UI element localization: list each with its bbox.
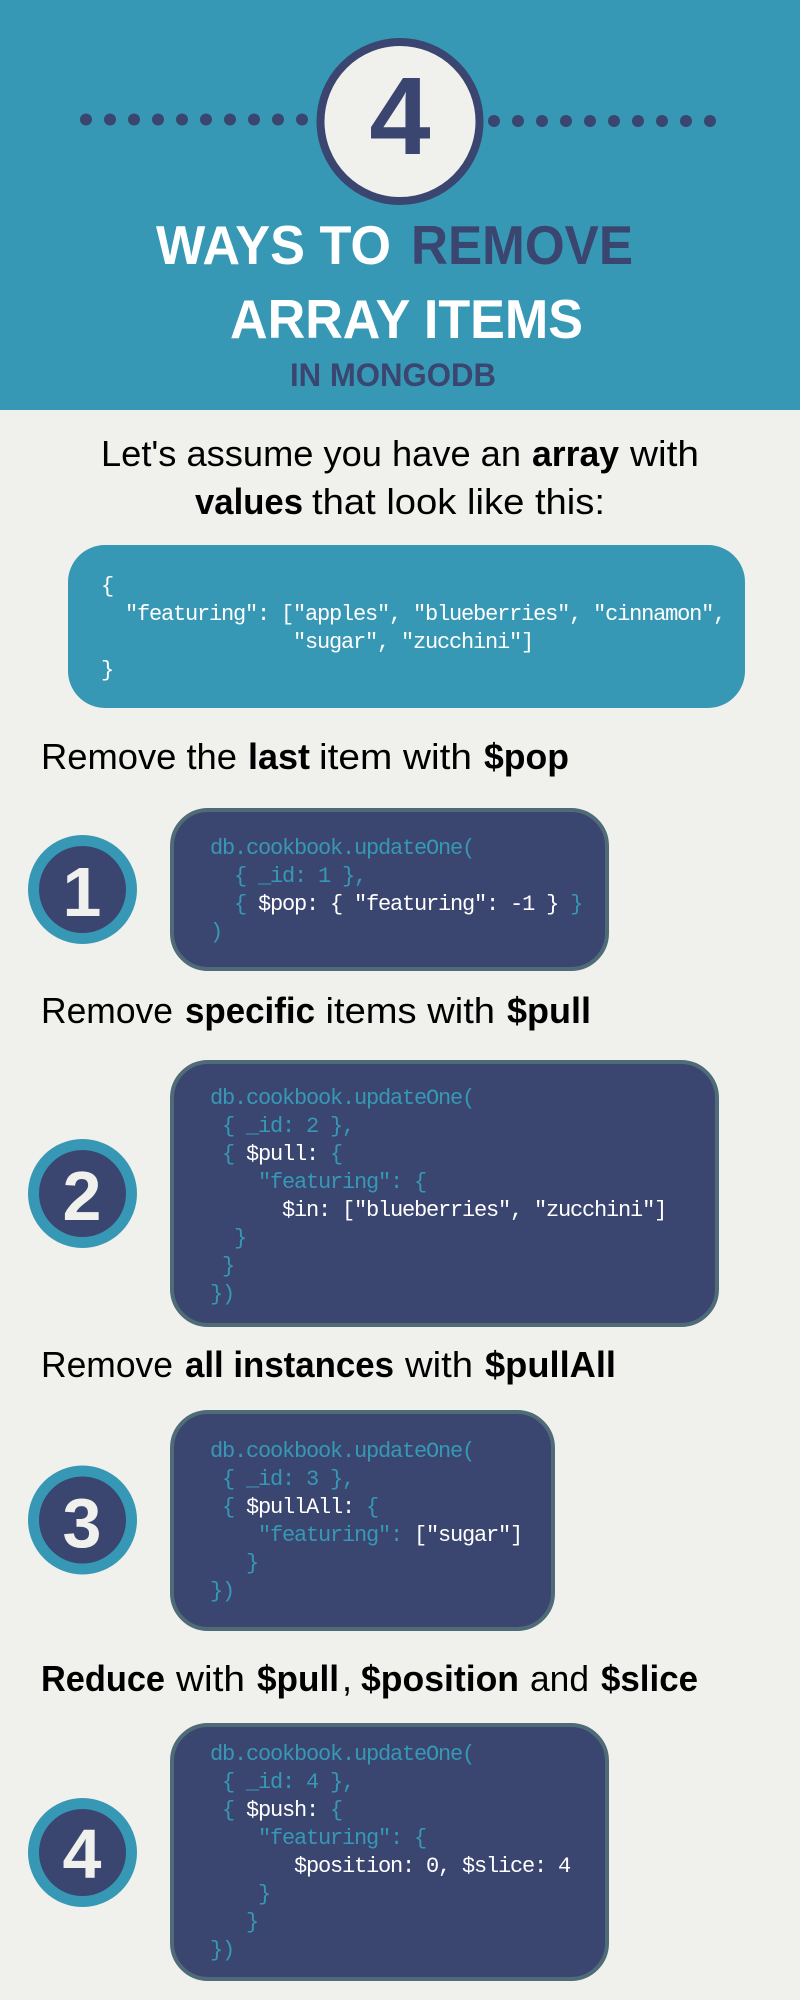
intro text [101, 433, 699, 522]
heading: pull: items with [326, 990, 495, 1031]
panel: pop code: { $pop: { "featuring": -1 } } [234, 892, 582, 917]
panel: push code: $position: 0, $slice: 4 [294, 1854, 571, 1879]
panel: pullAll code: } [246, 1551, 258, 1576]
intro text: with [629, 433, 699, 474]
heading: reduce: $position [361, 1658, 519, 1699]
heading: pop: last [248, 736, 310, 777]
step 4 badge [34, 1804, 132, 1902]
intro text: that look like this: [312, 481, 605, 522]
subtitle: IN MONGODB [290, 357, 496, 393]
dotted line right [488, 115, 716, 127]
intro text: values [195, 481, 303, 522]
step 2 badge [34, 1144, 132, 1242]
heading: pullAll: Remove [41, 1344, 173, 1385]
step 2 badge: 2 [63, 1157, 101, 1235]
panel: pull code: } [234, 1226, 246, 1251]
intro text: Let's assume you have an [101, 433, 521, 474]
panel: pull code: $in: ["blueberries", "zucchini"] [282, 1198, 666, 1223]
panel: push code: { $push: { [222, 1798, 342, 1823]
heading: reduce: and [530, 1658, 589, 1699]
code: example document: "sugar", "zucchini"] [293, 630, 533, 655]
code: example document: { [101, 574, 113, 599]
panel: push code: "featuring": { [258, 1826, 426, 1851]
panel: pull code: db.cookbook.updateOne( [210, 1086, 474, 1111]
panel: pull code [172, 1062, 717, 1325]
heading: pull: Remove [41, 990, 173, 1031]
panel: pull code: { _id: 2 }, [222, 1114, 354, 1139]
intro text: array [532, 433, 619, 474]
panel: push code: } [246, 1910, 258, 1935]
panel: pullAll code: "featuring": ["sugar"] [258, 1523, 522, 1548]
panel: pullAll code: { $pullAll: { [222, 1495, 378, 1520]
panel: pullAll code: }) [210, 1579, 234, 1604]
panel: pull code: "featuring": { [258, 1170, 426, 1195]
heading: pullAll [41, 1344, 616, 1385]
title [156, 214, 633, 350]
panel: push code: { _id: 4 }, [222, 1770, 354, 1795]
panel: pop code [172, 810, 607, 969]
panel: pullAll code: db.cookbook.updateOne( [210, 1439, 474, 1464]
panel: pullAll code: { _id: 3 }, [222, 1467, 354, 1492]
header banner [0, 0, 800, 410]
code: example document [101, 574, 725, 683]
heading: pullAll: all instances [185, 1344, 394, 1385]
heading: pop: item with [319, 736, 472, 777]
big number badge [320, 42, 480, 201]
heading: pop: Remove the [41, 736, 237, 777]
panel: push code: }) [210, 1938, 234, 1963]
heading: reduce: $slice [601, 1658, 698, 1699]
panel: pull code: } [222, 1254, 234, 1279]
dotted line left [80, 114, 308, 126]
panel: pop code: ) [210, 920, 222, 945]
step 1 badge [34, 840, 132, 938]
panel: pull code: { $pull: { [222, 1142, 342, 1167]
heading: reduce: with [175, 1658, 245, 1699]
panel: pullAll code [172, 1412, 553, 1629]
title: ARRAY ITEMS [230, 288, 583, 350]
panel: pop code: db.cookbook.updateOne( [210, 836, 474, 861]
panel: pop code: { _id: 1 }, [234, 864, 366, 889]
step 4 badge: 4 [63, 1815, 102, 1893]
title: WAYS TO [156, 214, 391, 276]
heading: reduce: , [342, 1658, 352, 1699]
panel: push code [172, 1725, 607, 1979]
panel: push code: db.cookbook.updateOne( [210, 1742, 474, 1767]
heading: pop: $pop [484, 736, 569, 777]
heading: pullAll: with [404, 1344, 473, 1385]
step 1 badge: 1 [63, 853, 101, 931]
heading: pull: specific [185, 990, 315, 1031]
code: example document: "featuring": ["apples", "blueberries", "cinnamon", [125, 602, 725, 627]
step 3 badge [34, 1471, 132, 1569]
heading: pull: $pull [507, 990, 591, 1031]
heading: pull [41, 990, 591, 1031]
heading: pullAll: $pullAll [485, 1344, 616, 1385]
heading: reduce [41, 1658, 698, 1699]
heading: reduce: Reduce [41, 1658, 165, 1699]
heading: pop [41, 736, 569, 777]
panel: example array [68, 545, 745, 708]
title: REMOVE [411, 214, 633, 276]
panel: pull code: }) [210, 1282, 234, 1307]
panel: push code: } [258, 1882, 270, 1907]
code: example document: } [101, 658, 113, 683]
heading: reduce: $pull [257, 1658, 339, 1699]
step 3 badge: 3 [63, 1484, 101, 1562]
big number badge: 4 [369, 55, 431, 178]
